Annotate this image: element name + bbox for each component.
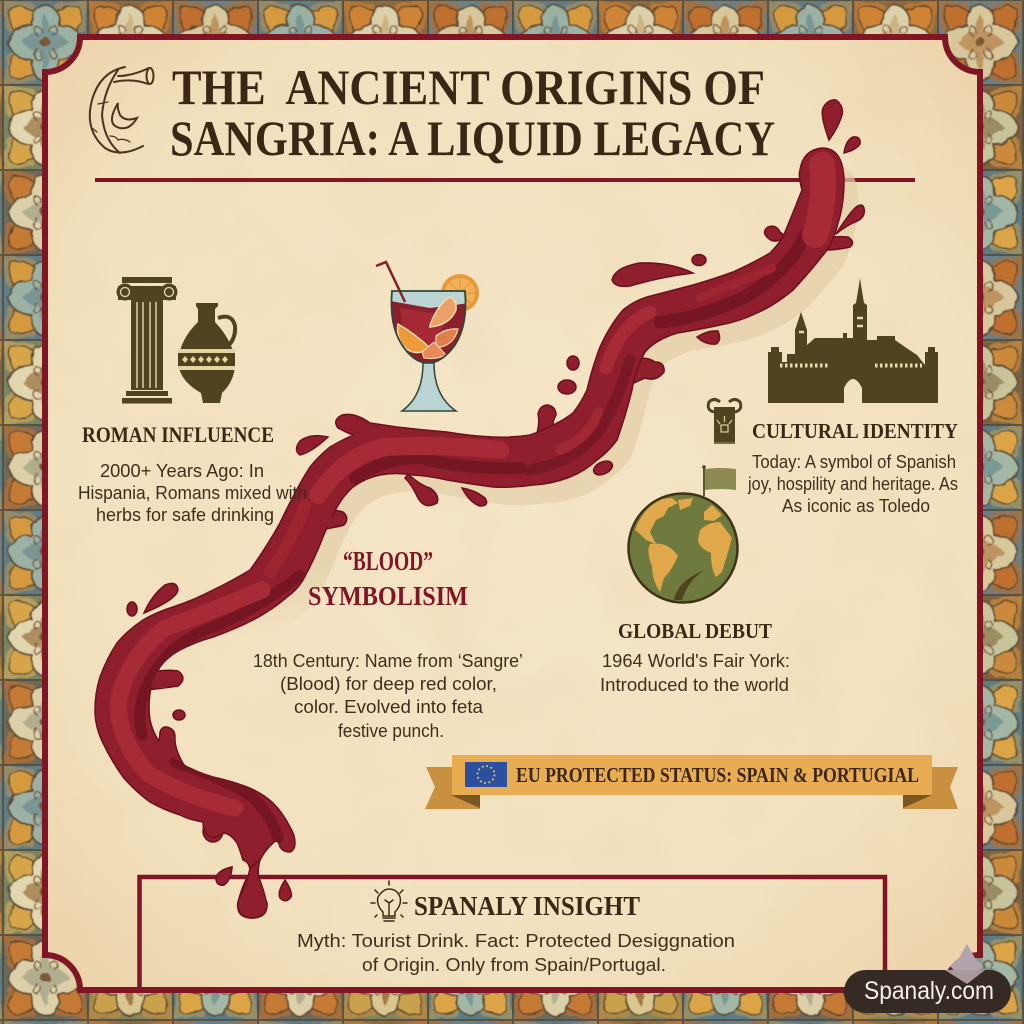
ribbon banner: EU protected status — [425, 755, 958, 809]
panel: Spanaly insight: Myth: Tourist Drink. Fact: Protected Desiggnation — [297, 931, 735, 951]
icon: amphora jug — [178, 303, 235, 403]
heading and text: global debut — [600, 619, 790, 695]
logo: Spanaly.com — [844, 944, 1011, 1013]
heading and text: cultural identity: As iconic as Toledo — [782, 496, 930, 516]
text: Roman influence body — [78, 461, 307, 525]
text: blood symbolism body — [253, 651, 523, 741]
text: blood symbolism body: festive punch. — [338, 721, 444, 741]
text: blood symbolism body: 18th Century: Name from ‘Sangre’ — [253, 651, 523, 671]
text: blood symbolism body: color. Evolved into feta — [294, 697, 484, 717]
ribbon banner: EU protected status: EU PROTECTED STATUS: SPAIN & PORTUGIAL — [516, 763, 919, 787]
icon: globe with flag — [628, 465, 738, 603]
text: Roman influence body: Hispania, Romans mixed with — [78, 483, 307, 503]
heading and text: cultural identity: CULTURAL IDENTITY — [752, 419, 958, 443]
heading and text: cultural identity: joy, hospility and heritage. As — [747, 474, 958, 494]
icon: EU flag — [465, 762, 507, 787]
heading and text: global debut: 1964 World's Fair York: — [602, 651, 790, 671]
heading and text: cultural identity — [747, 419, 958, 516]
text: Roman influence body: 2000+ Years Ago: In — [100, 461, 264, 481]
icon: heraldic crest — [708, 400, 741, 444]
wine drip over insight panel — [216, 860, 267, 918]
icon: drinking horn — [90, 67, 154, 153]
title rule — [95, 178, 915, 182]
text: blood symbolism body: (Blood) for deep red color, — [280, 674, 497, 694]
text: Roman influence body: herbs for safe drinking — [96, 505, 274, 525]
heading and text: cultural identity: Today: A symbol of Spanish — [752, 452, 956, 472]
icon: Toledo castle — [768, 278, 938, 403]
panel: Spanaly insight: of Origin. Only from Spain/Portugal. — [362, 955, 666, 975]
heading and text: global debut: Introduced to the world — [600, 675, 789, 695]
icon: light bulb — [371, 881, 407, 921]
title — [170, 59, 775, 166]
title: SANGRIA: A LIQUID LEGACY — [170, 110, 775, 166]
wine stream — [95, 100, 864, 936]
heading: blood symbolism — [308, 546, 468, 611]
icon: sangria glass — [376, 262, 479, 411]
panel: Spanaly insight — [140, 877, 885, 990]
panel: Spanaly insight: SPANALY INSIGHT — [414, 891, 640, 921]
logo: Spanaly.com: Spanaly.com — [864, 977, 994, 1005]
heading: blood symbolism: “BLOOD” — [343, 546, 433, 576]
heading: Roman influence: ROMAN INFLUENCE — [82, 422, 274, 447]
title: THE ANCIENT ORIGINS OF — [172, 59, 765, 115]
heading and text: global debut: GLOBAL DEBUT — [618, 619, 773, 643]
heading: blood symbolism: SYMBOLISIM — [308, 581, 468, 611]
icon: Roman column — [116, 277, 178, 404]
